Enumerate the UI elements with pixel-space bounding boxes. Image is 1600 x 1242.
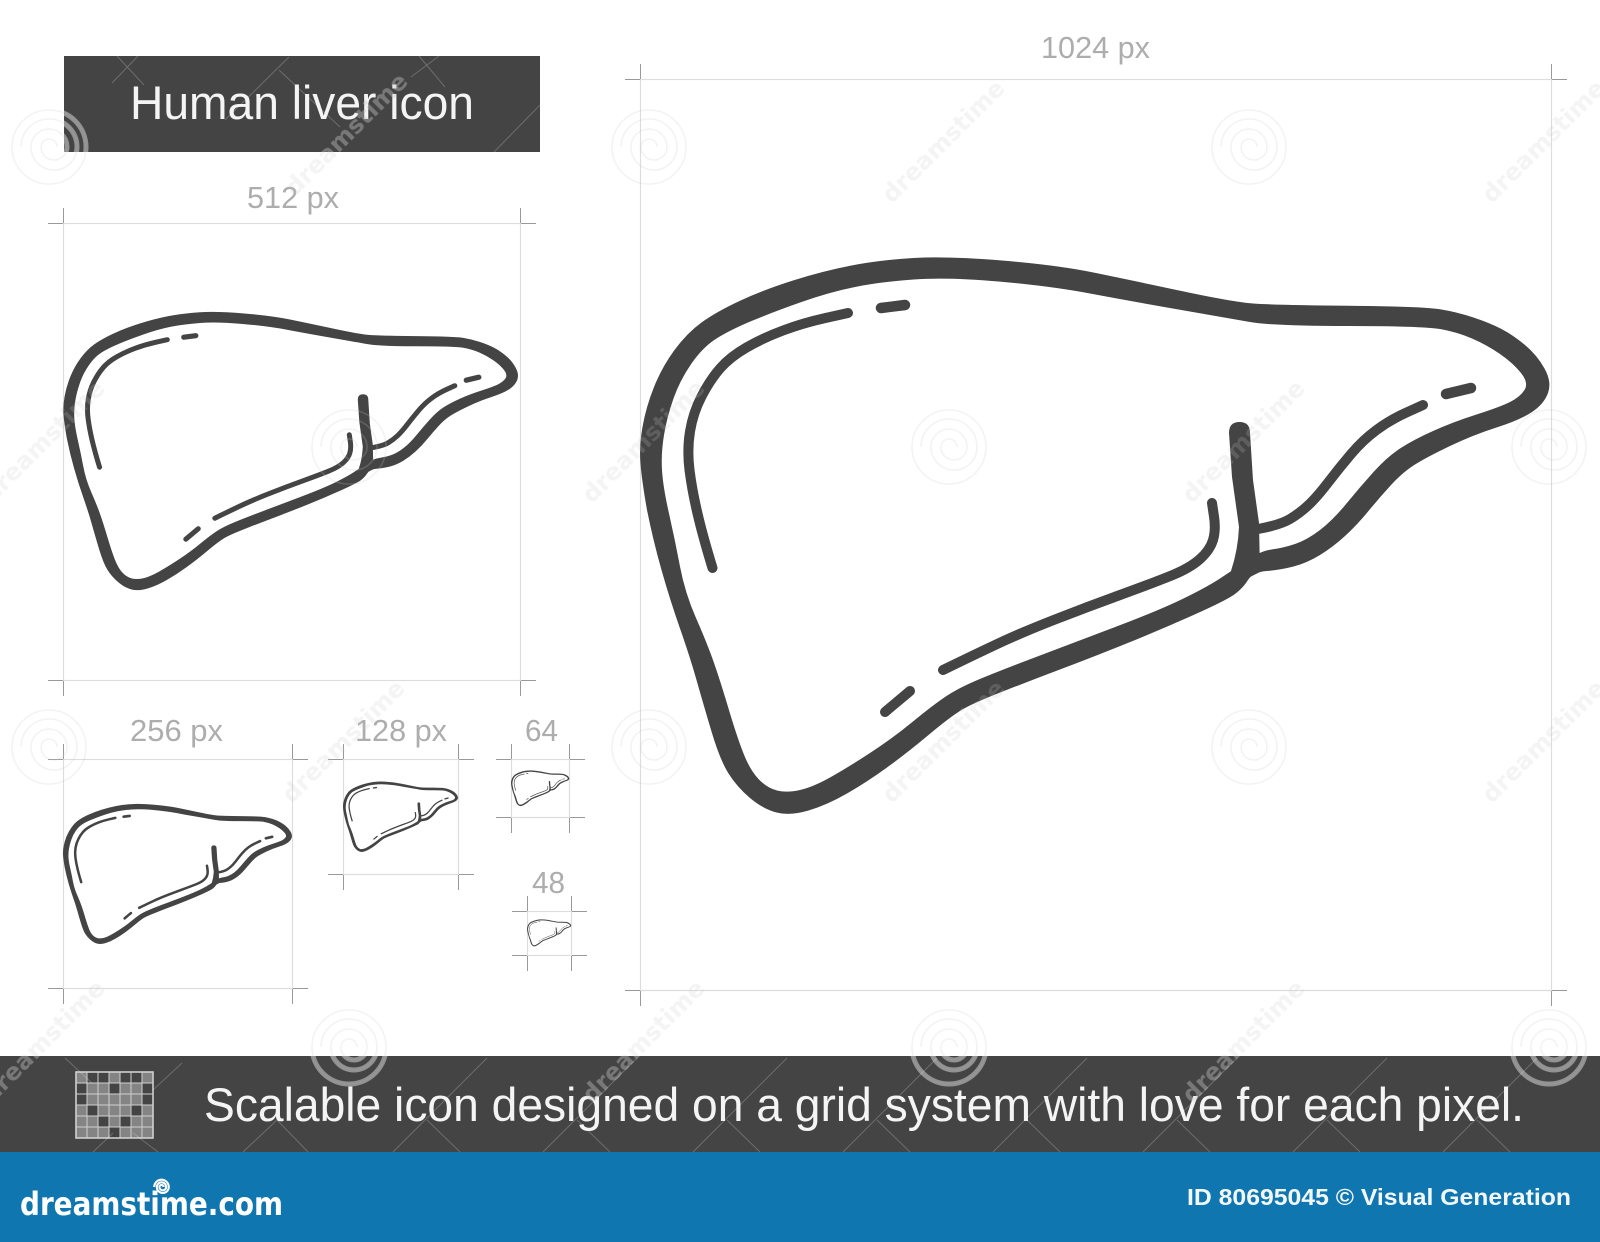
caption text: Scalable icon designed on a grid system with love for each pixel. (204, 1078, 1524, 1131)
size label: 128 px: 128 px (355, 713, 447, 748)
watermark overlay: dreamstime (279, 67, 413, 201)
watermark overlay: dreamstime (576, 974, 710, 1108)
bottom caption band (0, 1056, 1600, 1152)
icon: logo spiral (154, 1180, 169, 1193)
icon: liver 128 (343, 782, 458, 852)
watermark overlay: dreamstime (576, 374, 710, 508)
footer bar (0, 1152, 1600, 1242)
icon: liver 1024 (640, 257, 1549, 814)
image id and credit: ID 80695045 © Visual Generation (1187, 1184, 1571, 1210)
watermark overlay: dreamstime (576, 974, 710, 1108)
title text: Human liver icon (130, 76, 474, 129)
title banner (64, 56, 540, 152)
panel: 64 px icon (496, 713, 585, 833)
size label: 512 px: 512 px (247, 180, 339, 215)
icon: liver 256 (63, 804, 292, 944)
panel: 48 px icon (512, 865, 587, 971)
icon: liver 512 (63, 312, 518, 590)
panel: 1024 px icon (625, 30, 1567, 1006)
watermark overlay: dreamstime (1176, 374, 1310, 508)
icon: grid with heart (76, 1072, 153, 1138)
size label: 1024 px: 1024 px (1041, 30, 1150, 65)
panel: 512 px icon (48, 180, 536, 696)
size label: 48: 48 (532, 865, 565, 900)
size label: 256 px: 256 px (130, 713, 223, 748)
watermark overlay: dreamstime (276, 674, 410, 808)
watermark overlay: dreamstime (1176, 974, 1310, 1108)
logo: dreamstime.com: dreamstime.com (20, 1185, 283, 1223)
watermark overlay: dreamstime (1176, 974, 1310, 1108)
panel: 256 px icon (48, 713, 308, 1004)
watermark overlay: dreamstime (876, 74, 1010, 208)
watermark overlay: dreamstime (279, 67, 413, 201)
panel: 128 px icon (328, 713, 474, 890)
icon: liver 48 (527, 919, 571, 946)
icon: liver 64 (511, 770, 569, 806)
watermark overlay: dreamstime (876, 674, 1010, 808)
size label: 64: 64 (525, 713, 558, 748)
